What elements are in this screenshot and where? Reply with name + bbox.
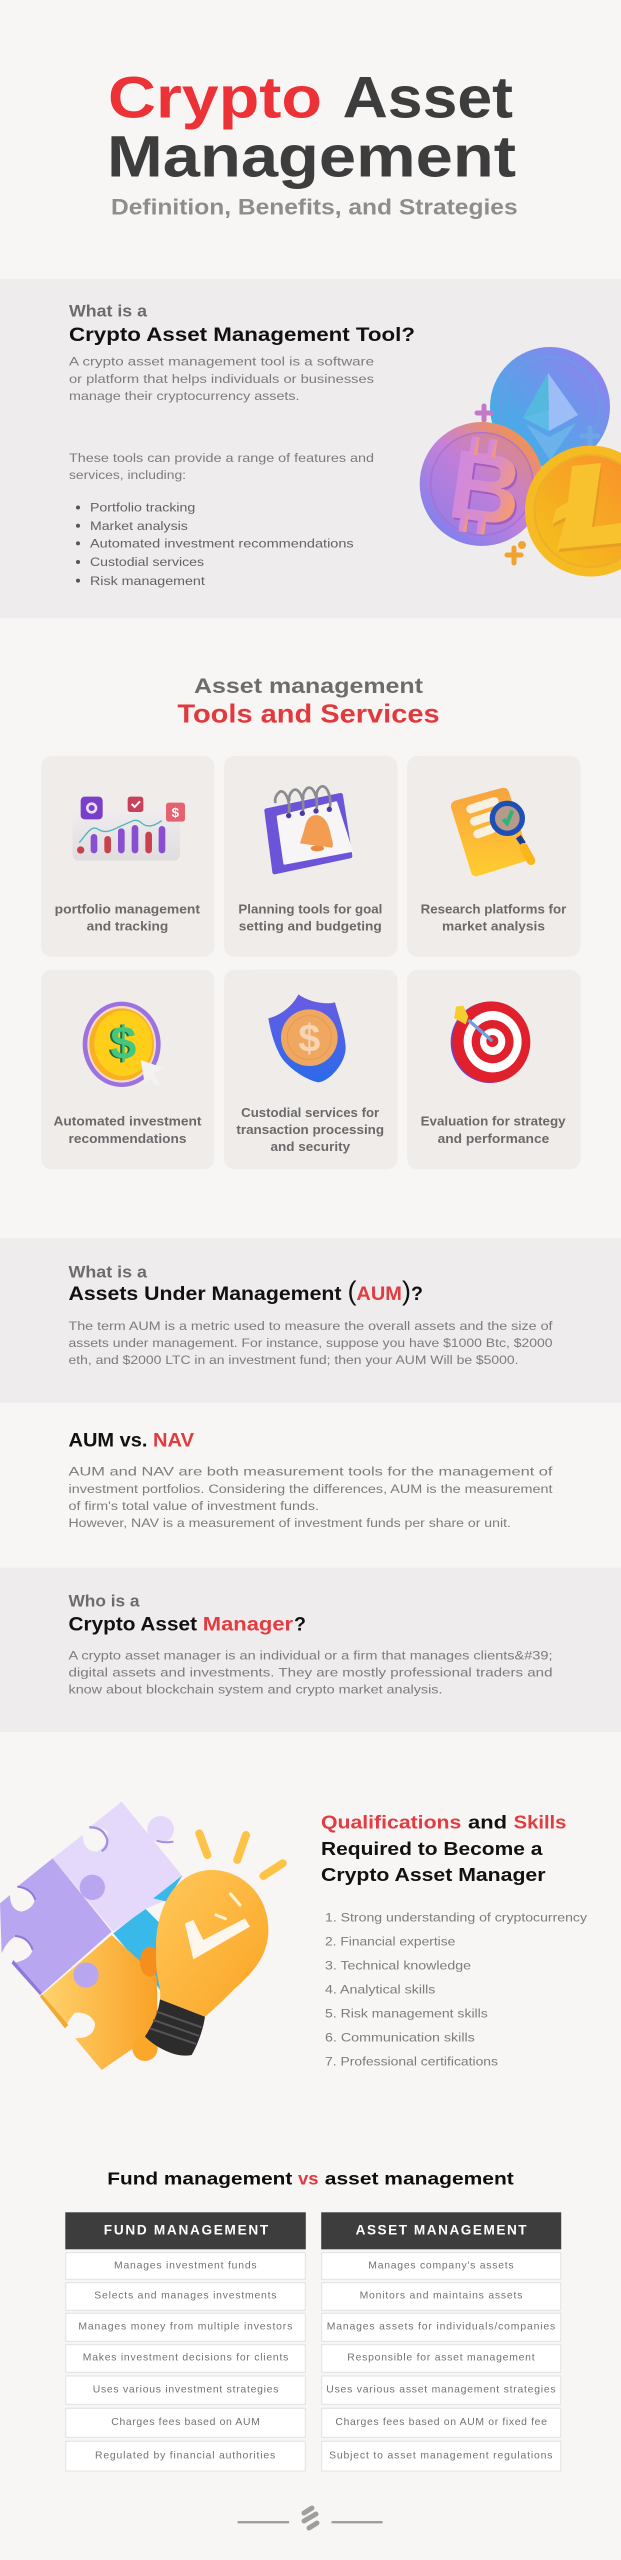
text block: AUM definition: eth, and $2000 LTC in an investment fund; then your AUM Will be $5000. (68, 1353, 518, 1367)
heading: assets under management (68, 1263, 423, 1306)
heading: asset management tools and services: Asset management (194, 674, 423, 698)
table rows: asset management: Monitors and maintains assets (360, 2291, 522, 2302)
text block: AUM vs NAV: AUM and NAV are both measurement tools for the management of (68, 1465, 553, 1479)
heading: crypto asset manager: Manager (203, 1614, 294, 1636)
text block: manager definition: digital assets and investments. They are mostly professional traders and (68, 1666, 553, 1680)
icon: dollar coin with cursor (83, 1002, 165, 1087)
text block: AUM definition: The term AUM is a metric used to measure the overall assets and the size of (68, 1319, 553, 1333)
icon: orange sparkle (507, 541, 526, 563)
label: research platforms: Research platforms for (421, 902, 566, 916)
heading: crypto asset manager: Crypto Asset (68, 1614, 198, 1636)
label: planning tools (238, 902, 382, 933)
title: Management (107, 125, 516, 190)
icon: portfolio chart (73, 797, 185, 861)
label: evaluation (421, 1115, 566, 1146)
table rows: fund management: Selects and manages investments (94, 2291, 276, 2302)
table column: asset management (321, 2212, 561, 2471)
text block: AUM vs NAV: of firm's total value of investment funds. (68, 1499, 319, 1513)
table rows: fund management: Manages investment funds (114, 2260, 257, 2271)
text block: manager definition (68, 1649, 553, 1697)
label: custodial services: Custodial services for (241, 1106, 379, 1120)
table header: fund management: FUND MANAGEMENT (104, 2222, 269, 2237)
heading: crypto asset manager (68, 1593, 306, 1636)
heading: qualifications and skills: Skills (514, 1811, 566, 1832)
heading: crypto asset manager: Who is a (68, 1593, 140, 1611)
table rows: fund management: Charges fees based on AUM (111, 2417, 260, 2428)
table rows: asset management (322, 2253, 561, 2471)
bullet list: features: Automated investment recommendations (90, 537, 354, 551)
heading: AUM vs NAV (68, 1429, 194, 1451)
icon: crypto coins (420, 347, 621, 576)
heading: what is a tool: What is a (69, 302, 148, 320)
numbered list: skills: 5. Risk management skills (325, 2007, 488, 2021)
bullet list: features: Portfolio tracking (90, 501, 195, 515)
table rows: asset management: Subject to asset management regulations (329, 2451, 552, 2462)
icon: blue plus (582, 428, 598, 444)
heading: AUM vs NAV: NAV (153, 1429, 194, 1451)
table rows: asset management: Uses various asset management strategies (326, 2384, 556, 2395)
panel: what is a crypto asset management tool (0, 279, 621, 618)
panel: research platforms card (407, 756, 580, 957)
title (107, 65, 516, 190)
text block: AUM definition (68, 1319, 553, 1367)
label: portfolio management: and tracking (87, 919, 168, 933)
icon: bitcoin coin (420, 422, 544, 549)
icon: shield with coin (268, 994, 346, 1082)
table column: fund management (65, 2212, 306, 2471)
table header: asset management: ASSET MANAGEMENT (356, 2222, 527, 2237)
numbered list: skills: 6. Communication skills (325, 2031, 475, 2045)
label: evaluation: Evaluation for strategy (421, 1115, 566, 1129)
label: research platforms (421, 902, 566, 933)
label: automated investment: recommendations (68, 1132, 186, 1146)
title: Asset (343, 65, 513, 130)
label: evaluation: and performance (438, 1132, 549, 1146)
heading: fund vs asset management: asset management (325, 2168, 514, 2188)
icon: bitcoin B symbol: B (444, 430, 531, 549)
heading: qualifications and skills: Qualifications (321, 1811, 461, 1832)
numbered list: skills: 2. Financial expertise (325, 1935, 455, 1949)
label: planning tools: setting and budgeting (239, 919, 382, 933)
icon: ethereum coin (490, 347, 610, 467)
bullet list: features: Custodial services (90, 555, 204, 569)
table rows: fund management (66, 2253, 305, 2471)
text block: features intro: services, including: (69, 468, 186, 482)
heading: fund vs asset management: Fund management (107, 2168, 292, 2188)
heading: fund vs asset management (107, 2168, 514, 2188)
text block: definition (69, 354, 374, 403)
icon: document and magnifier (451, 788, 531, 876)
heading: assets under management: ) (402, 1276, 411, 1306)
label: portfolio management (55, 902, 201, 933)
table rows: asset management: Manages company's assets (368, 2260, 514, 2271)
icon: shield with coin: $ (298, 1016, 320, 1060)
icon: bitcoin B symbol: B (442, 428, 529, 547)
table rows: asset management: Manages assets for individuals/companies (327, 2322, 555, 2333)
label: research platforms: market analysis (442, 919, 545, 933)
heading: assets under management: What is a (68, 1263, 148, 1281)
label: automated investment (54, 1115, 202, 1146)
text block: definition: or platform that helps individuals or businesses (69, 372, 374, 386)
heading: asset management tools and services: Tools and Services (177, 698, 440, 728)
text block: definition: manage their cryptocurrency assets. (69, 389, 300, 403)
bullet list: features: Market analysis (90, 519, 188, 533)
heading: what is a tool: Crypto Asset Management Tool? (69, 324, 415, 346)
table header: fund management (65, 2212, 306, 2249)
icon: litecoin coin (525, 446, 621, 576)
heading: crypto asset manager: ? (294, 1614, 306, 1636)
icon: blue puzzle piece (113, 1908, 160, 1990)
numbered list: skills: 1. Strong understanding of cryptocurrency (325, 1911, 588, 1925)
icon: dollar coin with cursor: $ (108, 1017, 134, 1069)
bullet list: features: Risk management (90, 574, 205, 588)
table rows: asset management: Responsible for asset management (347, 2353, 535, 2364)
footer logo (238, 2508, 383, 2528)
heading: qualifications and skills: Required to Become a (321, 1838, 543, 1859)
icon: yellow puzzle piece (40, 1935, 160, 2070)
heading: what is a tool (69, 302, 415, 346)
text block: AUM vs NAV (68, 1465, 553, 1530)
icon: purple puzzle piece (0, 1858, 112, 1995)
numbered list: skills: 4. Analytical skills (325, 1983, 435, 1997)
panel: what is AUM (0, 1238, 621, 1403)
icon: dollar coin with cursor: $ (110, 1016, 136, 1068)
icon: light bulb (145, 1870, 268, 2056)
panel: evaluation card (407, 970, 580, 1169)
subtitle: Definition, Benefits, and Strategies (111, 195, 518, 220)
heading: assets under management: ? (411, 1283, 423, 1305)
icon: light purple puzzle piece (53, 1802, 183, 1932)
panel: automated investment card (41, 970, 214, 1169)
panel: portfolio management card (41, 756, 214, 957)
icon: target with arrow (451, 1001, 530, 1083)
icon: portfolio chart: $ (172, 805, 180, 820)
panel: custodial services card (224, 970, 398, 1169)
title: Crypto (108, 65, 322, 130)
heading: AUM vs NAV: AUM vs. (68, 1429, 148, 1451)
text block: features intro: These tools can provide a range of features and (69, 451, 374, 465)
icon: puzzle and light bulb (0, 1802, 283, 2070)
heading: qualifications and skills: Crypto Asset Manager (321, 1864, 546, 1885)
bullet list: features (76, 501, 354, 588)
heading: asset management tools and services (177, 674, 440, 728)
table rows: asset management: Charges fees based on AUM or fixed fee (335, 2417, 547, 2428)
icon: light rays (199, 1833, 283, 1876)
heading: assets under management: ( (348, 1276, 356, 1306)
heading: assets under management: AUM (356, 1283, 402, 1305)
heading: qualifications and skills: and (468, 1811, 507, 1832)
icon: calendar with bell (267, 786, 351, 872)
heading: qualifications and skills (321, 1811, 566, 1885)
label: custodial services: and security (270, 1140, 350, 1154)
text block: AUM definition: assets under management. For instance, suppose you have $1000 Btc, $2000 (68, 1336, 553, 1350)
table rows: fund management: Uses various investment strategies (93, 2384, 278, 2395)
table rows: fund management: Regulated by financial authorities (95, 2451, 275, 2462)
heading: fund vs asset management: vs (298, 2168, 319, 2188)
text block: AUM vs NAV: However, NAV is a measurement of investment funds per share or unit. (68, 1516, 511, 1530)
numbered list: skills: 3. Technical knowledge (325, 1959, 471, 1973)
text block: features intro (69, 451, 374, 482)
icon: small purple plus (477, 406, 491, 420)
label: custodial services (236, 1106, 384, 1154)
text block: manager definition: A crypto asset manager is an individual or a firm that manages clients&#39; (68, 1649, 552, 1663)
heading: assets under management: Assets Under Management (68, 1283, 342, 1305)
label: portfolio management: portfolio management (55, 902, 201, 916)
panel: who is a crypto asset manager (0, 1568, 621, 1732)
numbered list: skills: 7. Professional certifications (325, 2055, 498, 2069)
panel: planning tools card (224, 756, 398, 957)
table header: asset management (321, 2212, 561, 2249)
label: planning tools: Planning tools for goal (238, 902, 382, 916)
table rows: fund management: Makes investment decisions for clients (83, 2353, 288, 2364)
label: custodial services: transaction processing (236, 1123, 384, 1137)
text block: AUM vs NAV: investment portfolios. Considering the differences, AUM is the measurement (68, 1482, 553, 1496)
label: automated investment: Automated investment (54, 1115, 202, 1129)
table rows: fund management: Manages money from multiple investors (78, 2322, 292, 2333)
text block: definition: A crypto asset management tool is a software (69, 354, 374, 368)
text block: manager definition: know about blockchain system and crypto market analysis. (68, 1683, 442, 1697)
numbered list: skills (325, 1911, 588, 2069)
